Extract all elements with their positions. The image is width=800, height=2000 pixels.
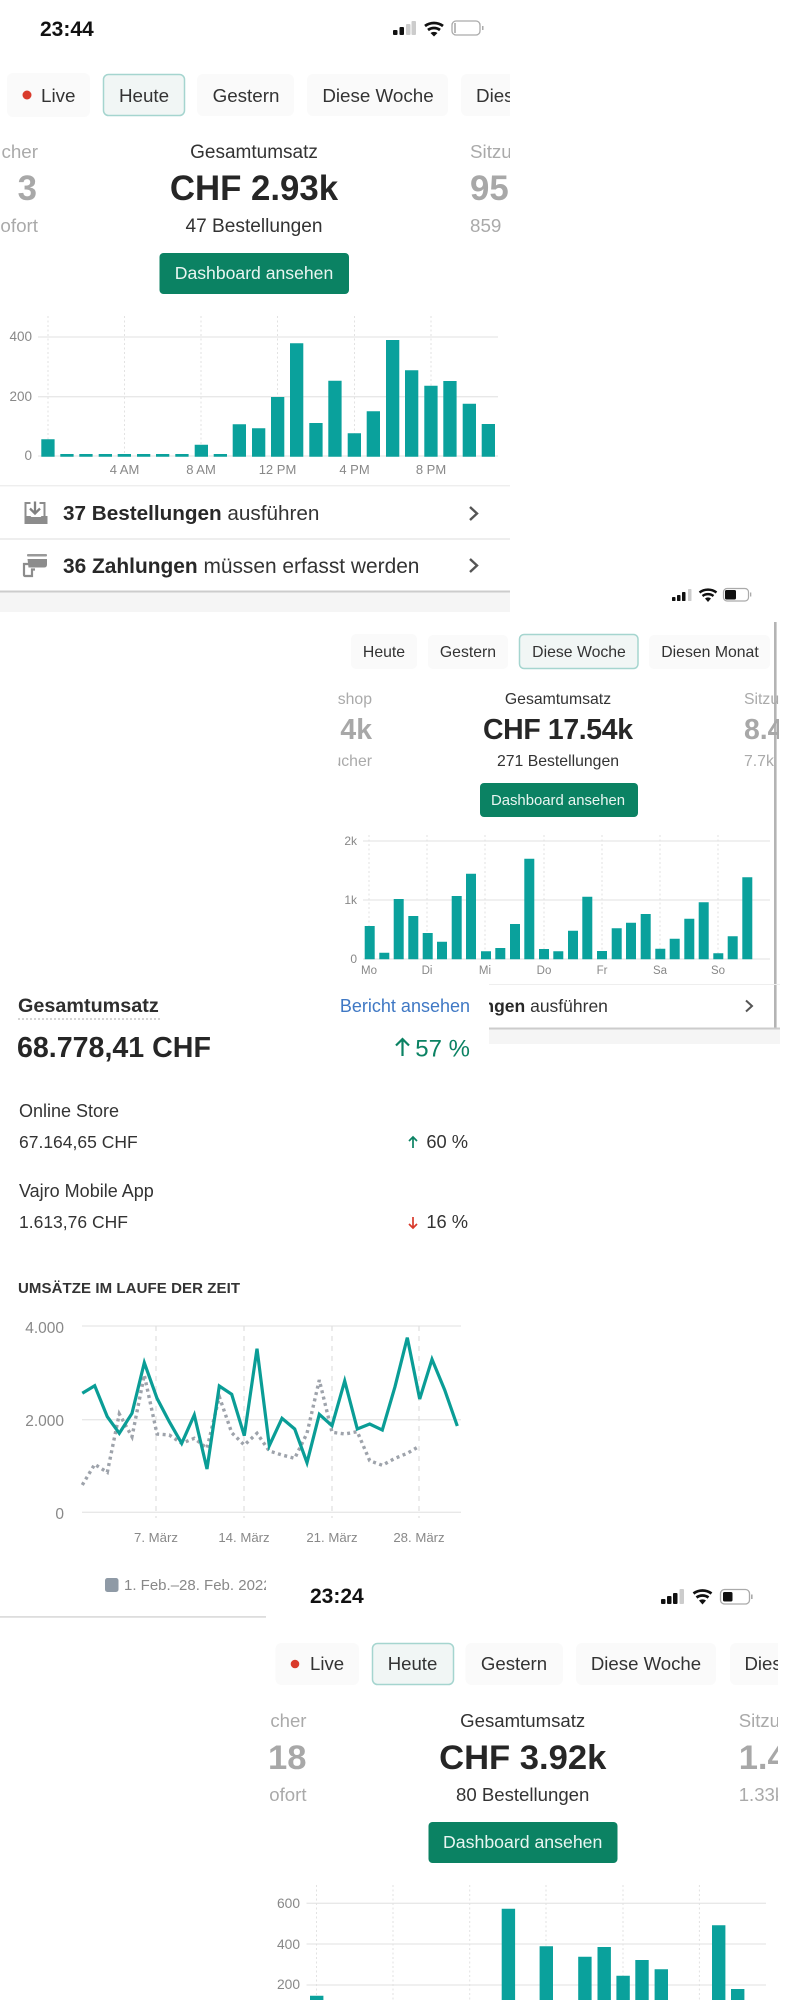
metric: left side visitors: [270, 1714, 306, 1801]
status time: 23:44: [40, 18, 94, 41]
channel: Online Store: 67.164,65 CHF: [19, 1132, 138, 1152]
bar chart: hourly sales: 12 PM: [259, 462, 296, 477]
tab strip: Heute: [363, 644, 405, 661]
tab: Heute active: [372, 1644, 454, 1684]
icon: signal, wifi and battery: [672, 588, 751, 602]
icon: signal, wifi and battery: [661, 1589, 753, 1604]
tab: Diese Woche: Diese Woche: [322, 85, 434, 106]
bar chart: hourly sales: 8 AM: [186, 462, 216, 477]
metric: Gesamtumsatz: [483, 691, 633, 770]
tab: Diese Woche: Diese Woche: [591, 1653, 701, 1674]
bar chart: weekly sales: Fr: [597, 965, 608, 977]
tab strip: Diesen Monat: [661, 644, 759, 661]
channel: Online Store: Online Store: [19, 1101, 119, 1121]
tab strip: Gestern: [440, 644, 496, 661]
metric: left side visitors: 18: [268, 1739, 306, 1777]
button: Dashboard ansehen: [160, 253, 349, 294]
heading: Gesamtumsatz: Gesamtumsatz: [18, 995, 159, 1017]
metric: left side online shop: shop: [338, 691, 372, 708]
bar chart: hourly sales: 8 PM: [416, 462, 446, 477]
row: Bestellungen ausführen: [489, 984, 780, 1044]
metric: left side online shop: 4k: [340, 714, 372, 746]
series: previous period: [82, 1375, 420, 1485]
channel: Vajro Mobile App: [19, 1181, 468, 1232]
tab: Live: [276, 1643, 359, 1685]
bar chart: hourly sales: [9, 316, 498, 477]
bar chart: hourly sales cropped: 200: [277, 1977, 300, 1992]
channel: Online Store: [19, 1101, 468, 1152]
metric: right side sessions: 1.33k: [739, 1784, 785, 1805]
channel: Vajro Mobile App: 1.613,76 CHF: [19, 1212, 128, 1232]
metric: Gesamtumsatz: Gesamtumsatz: [460, 1710, 585, 1731]
chart heading: UMSÄTZE IM LAUFE DER ZEIT: [18, 1280, 240, 1297]
bar chart: hourly sales: 400: [9, 329, 32, 344]
metric: left side visitors: cher: [270, 1710, 306, 1731]
icon: download tray: [24, 502, 48, 524]
bar chart: hourly sales: 4 AM: [110, 462, 139, 477]
tab: Gestern: Gestern: [213, 85, 279, 106]
metric: left side visitors: 3: [18, 169, 37, 208]
tab: Diesen Monat clipped: [746, 1656, 778, 1670]
panel bottom line: [0, 1616, 266, 1618]
metric: right side sessions: 8.4k: [744, 714, 799, 746]
metric: Gesamtumsatz: Gesamtumsatz: [505, 691, 611, 708]
bar chart: hourly sales: 200: [9, 389, 32, 404]
channel: Online Store: 60 %: [426, 1131, 468, 1152]
button: Dashboard ansehen: Dashboard ansehen: [491, 793, 625, 809]
total value: 68.778,41 CHF: [17, 1032, 211, 1064]
metric: Gesamtumsatz: CHF 17.54k: [483, 714, 633, 746]
row: Bestellungen ausführen: 37 Bestellungen ausführen: [63, 502, 319, 525]
bar chart: weekly sales: Do: [537, 965, 551, 977]
line chart: sales over time: [25, 1320, 461, 1545]
bar chart: hourly sales cropped: [277, 1885, 766, 2000]
tab: Heute active: Heute: [119, 85, 169, 106]
bar chart: weekly sales: [344, 834, 770, 977]
status time: 23:24: [310, 1585, 364, 1608]
metric: Gesamtumsatz: CHF 3.92k: [439, 1739, 607, 1777]
line chart: sales over time: 21. März: [306, 1530, 358, 1545]
change: up 57 percent: 57 %: [415, 1036, 470, 1062]
metric: left side online shop: ucher: [332, 753, 372, 770]
button: Dashboard ansehen: Dashboard ansehen: [443, 1832, 602, 1852]
line chart: sales over time: 0: [55, 1506, 64, 1523]
metric: right side sessions: 95: [470, 169, 509, 208]
metric: left side visitors: [1, 144, 38, 232]
line chart: sales over time: 4.000: [25, 1320, 64, 1337]
icon: signal, wifi and battery: [393, 21, 484, 36]
scrollbar: [774, 622, 777, 1043]
tab: Gestern: [466, 1643, 563, 1685]
button: Dashboard ansehen: [428, 1822, 618, 1863]
metric: right side sessions: [740, 1714, 778, 1801]
bar chart: weekly sales: So: [711, 965, 725, 977]
bar chart: hourly sales: 4 PM: [339, 462, 370, 477]
tab: Live: [22, 88, 75, 102]
metric: left side visitors: ofort: [0, 215, 39, 236]
metric: Gesamtumsatz: 271 Bestellungen: [497, 753, 619, 770]
metric: Gesamtumsatz: 47 Bestellungen: [186, 216, 322, 237]
metric: Gesamtumsatz: 80 Bestellungen: [456, 1784, 589, 1805]
panel: dashboard this week: [332, 588, 800, 1044]
bar chart: hourly sales cropped: 600: [277, 1896, 300, 1911]
row: Bestellungen ausführen: [0, 485, 510, 525]
panel: dashboard today 23:24: [268, 1585, 800, 2000]
metric: Gesamtumsatz: CHF 2.93k: [170, 169, 339, 208]
bar chart: weekly sales: Di: [422, 965, 432, 977]
metric: right side sessions: [744, 692, 779, 766]
channel: Vajro Mobile App: 16 %: [426, 1211, 468, 1232]
line chart: sales over time: 14. März: [218, 1530, 270, 1545]
bar chart: weekly sales: 1k: [344, 893, 358, 907]
metric: Gesamtumsatz: [170, 142, 339, 237]
bar chart: hourly sales cropped: 400: [277, 1937, 300, 1952]
tab: Gestern: [214, 89, 278, 102]
tab: Gestern: Gestern: [481, 1653, 547, 1674]
tab: Live: Live: [310, 1653, 344, 1674]
panel: dashboard today 23:44: [0, 18, 554, 612]
link: Bericht ansehen: Bericht ansehen: [340, 996, 470, 1016]
bar chart: weekly sales: Mo: [361, 965, 377, 977]
row: Zahlungen müssen erfasst werden: 36 Zahlungen müssen erfasst werden: [63, 555, 419, 578]
metric: right side sessions: Sitzungen: [470, 141, 554, 162]
icon: payment cards: [24, 554, 47, 576]
row: Zahlungen müssen erfasst werden: [0, 538, 510, 578]
row: Bestellungen ausführen: 37 Bestellungen ausführen: [391, 996, 608, 1016]
button: Dashboard ansehen: Dashboard ansehen: [175, 263, 333, 283]
channel: Vajro Mobile App: Vajro Mobile App: [19, 1181, 154, 1201]
metric: left side visitors: cher: [1, 141, 38, 162]
series: current period: [82, 1338, 457, 1469]
tab: Diesen Monat clipped: [478, 88, 510, 102]
bar chart: hourly sales: 0: [24, 448, 32, 463]
bar chart: weekly sales: 0: [350, 952, 357, 966]
metric: right side sessions: 859: [470, 215, 501, 236]
legend: 1. Feb.–28. Feb. 2022: [124, 1577, 272, 1594]
footer band: [0, 590, 510, 612]
tab: Diesen Monat clipped: Diesen: [476, 85, 534, 106]
tab: Diese Woche: [576, 1643, 716, 1685]
line chart: sales over time: 28. März: [393, 1530, 445, 1545]
line chart: sales over time: 7. März: [134, 1530, 178, 1545]
tab: Heute active: Heute: [388, 1653, 437, 1674]
tab: Live: Live: [41, 85, 75, 106]
metric: left side online shop: [338, 692, 372, 766]
line chart: sales over time: 2.000: [25, 1413, 64, 1430]
metric: Gesamtumsatz: [439, 1710, 607, 1805]
tab: Heute active: [104, 74, 184, 116]
bar chart: weekly sales: Mi: [479, 965, 491, 977]
bar chart: weekly sales: 2k: [344, 834, 358, 848]
metric: Gesamtumsatz: Gesamtumsatz: [190, 142, 318, 163]
tab strip: [351, 634, 770, 669]
bar chart: weekly sales: Sa: [653, 965, 668, 977]
tab strip: Diese Woche: [532, 644, 626, 661]
panel: total sales report: [0, 995, 470, 1618]
button: Dashboard ansehen: [480, 783, 638, 817]
metric: left side visitors: ofort: [269, 1784, 307, 1805]
tab: Diese Woche: [324, 88, 433, 102]
metric: right side sessions: [470, 144, 510, 232]
